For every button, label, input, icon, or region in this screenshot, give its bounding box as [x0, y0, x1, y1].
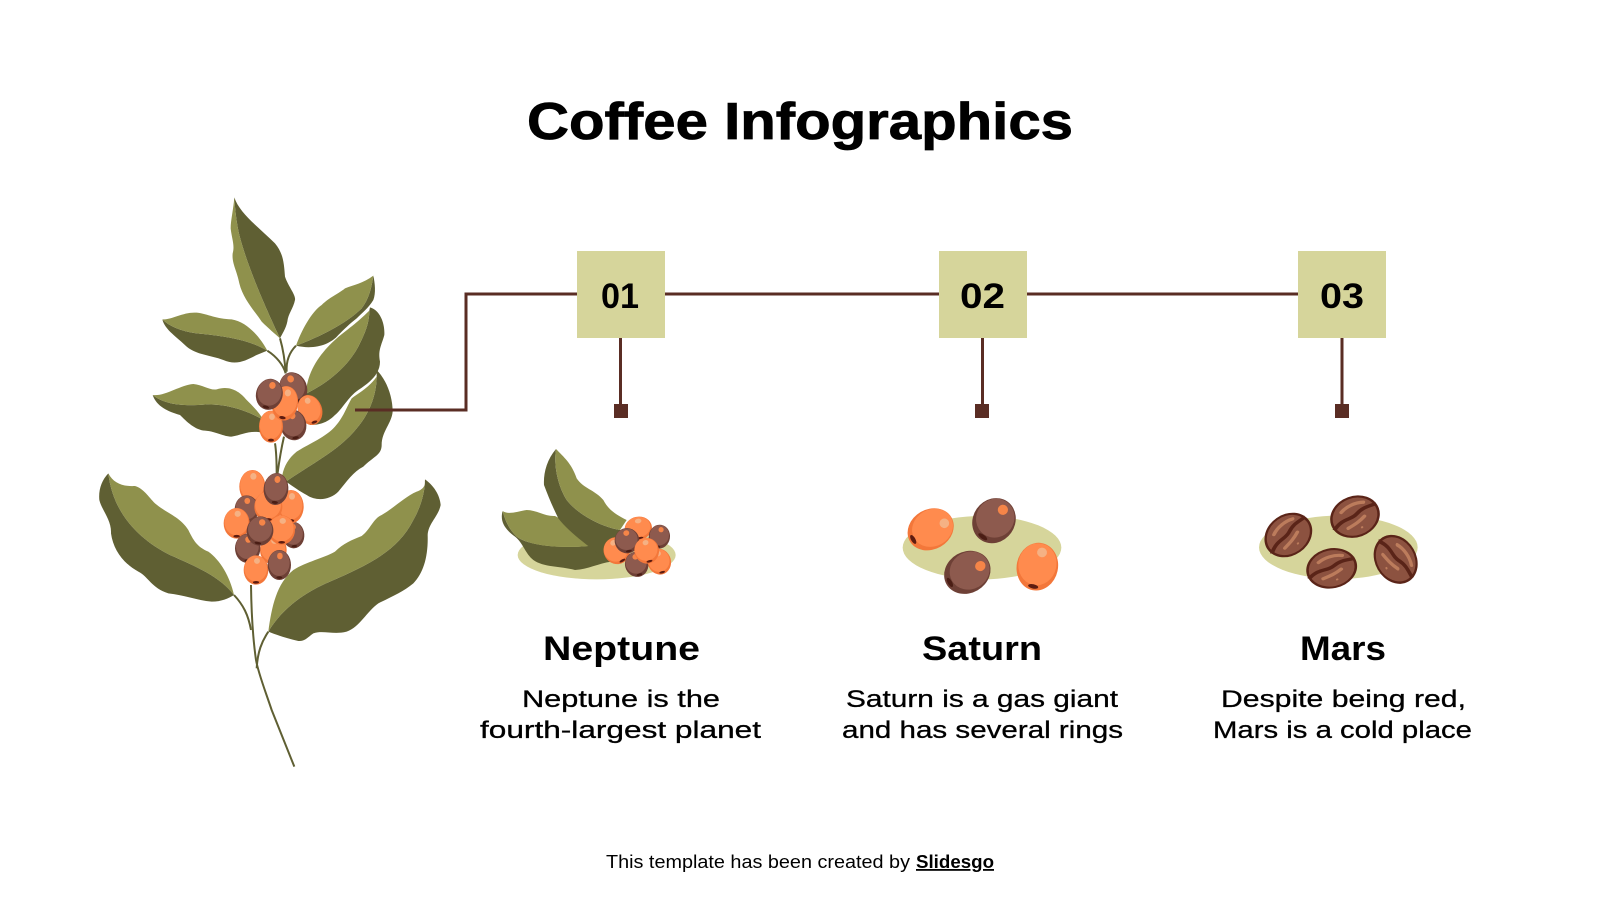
footer credit: Slidesgo	[916, 852, 994, 872]
connector lines	[355, 294, 1342, 410]
icon: coffee cherries	[900, 490, 1063, 602]
step 01 badge: 01	[601, 277, 639, 316]
text: Mars description: Mars is a cold place	[1213, 717, 1472, 744]
text: Neptune description: Neptune is the	[522, 686, 720, 713]
heading: Saturn: Saturn	[922, 630, 1042, 668]
step 01 badge	[577, 251, 665, 338]
text: Saturn description	[842, 686, 1123, 744]
leaf: middle right	[300, 307, 384, 425]
step 02 badge	[939, 251, 1027, 338]
title: Coffee Infographics	[527, 93, 1073, 151]
berries: lower cluster	[224, 470, 305, 585]
step 03 badge: 03	[1320, 277, 1364, 316]
berries: upper cluster	[252, 368, 327, 443]
leaf: upper left	[162, 313, 267, 363]
illustration: coffee branch	[99, 197, 441, 767]
step 02 badge: 02	[960, 277, 1005, 316]
text: Mars description: Despite being red,	[1221, 686, 1466, 713]
icon: roasted beans	[1256, 489, 1426, 593]
stems: lower branch	[234, 585, 294, 767]
icon: leaves and berries	[502, 449, 676, 580]
leaf: upper right	[296, 276, 375, 347]
text: Neptune description	[480, 686, 761, 744]
leaf: bottom left	[99, 473, 234, 602]
leaf: middle left	[153, 384, 263, 437]
text: Neptune description: fourth-largest planet	[480, 717, 761, 744]
connector end squares	[614, 404, 1349, 418]
heading: Mars: Mars	[1300, 630, 1386, 668]
leaf: bottom right	[268, 479, 441, 641]
text: Saturn description: and has several rings	[842, 717, 1123, 744]
stems: upper branch	[267, 338, 296, 475]
text: Mars description	[1213, 686, 1472, 744]
leaf: top	[231, 197, 295, 338]
heading: Neptune: Neptune	[543, 630, 700, 668]
leaf: lower right	[282, 370, 393, 499]
step 03 badge	[1298, 251, 1386, 338]
footer credit: This template has been created by	[606, 852, 910, 872]
text: Saturn description: Saturn is a gas giant	[846, 686, 1118, 713]
